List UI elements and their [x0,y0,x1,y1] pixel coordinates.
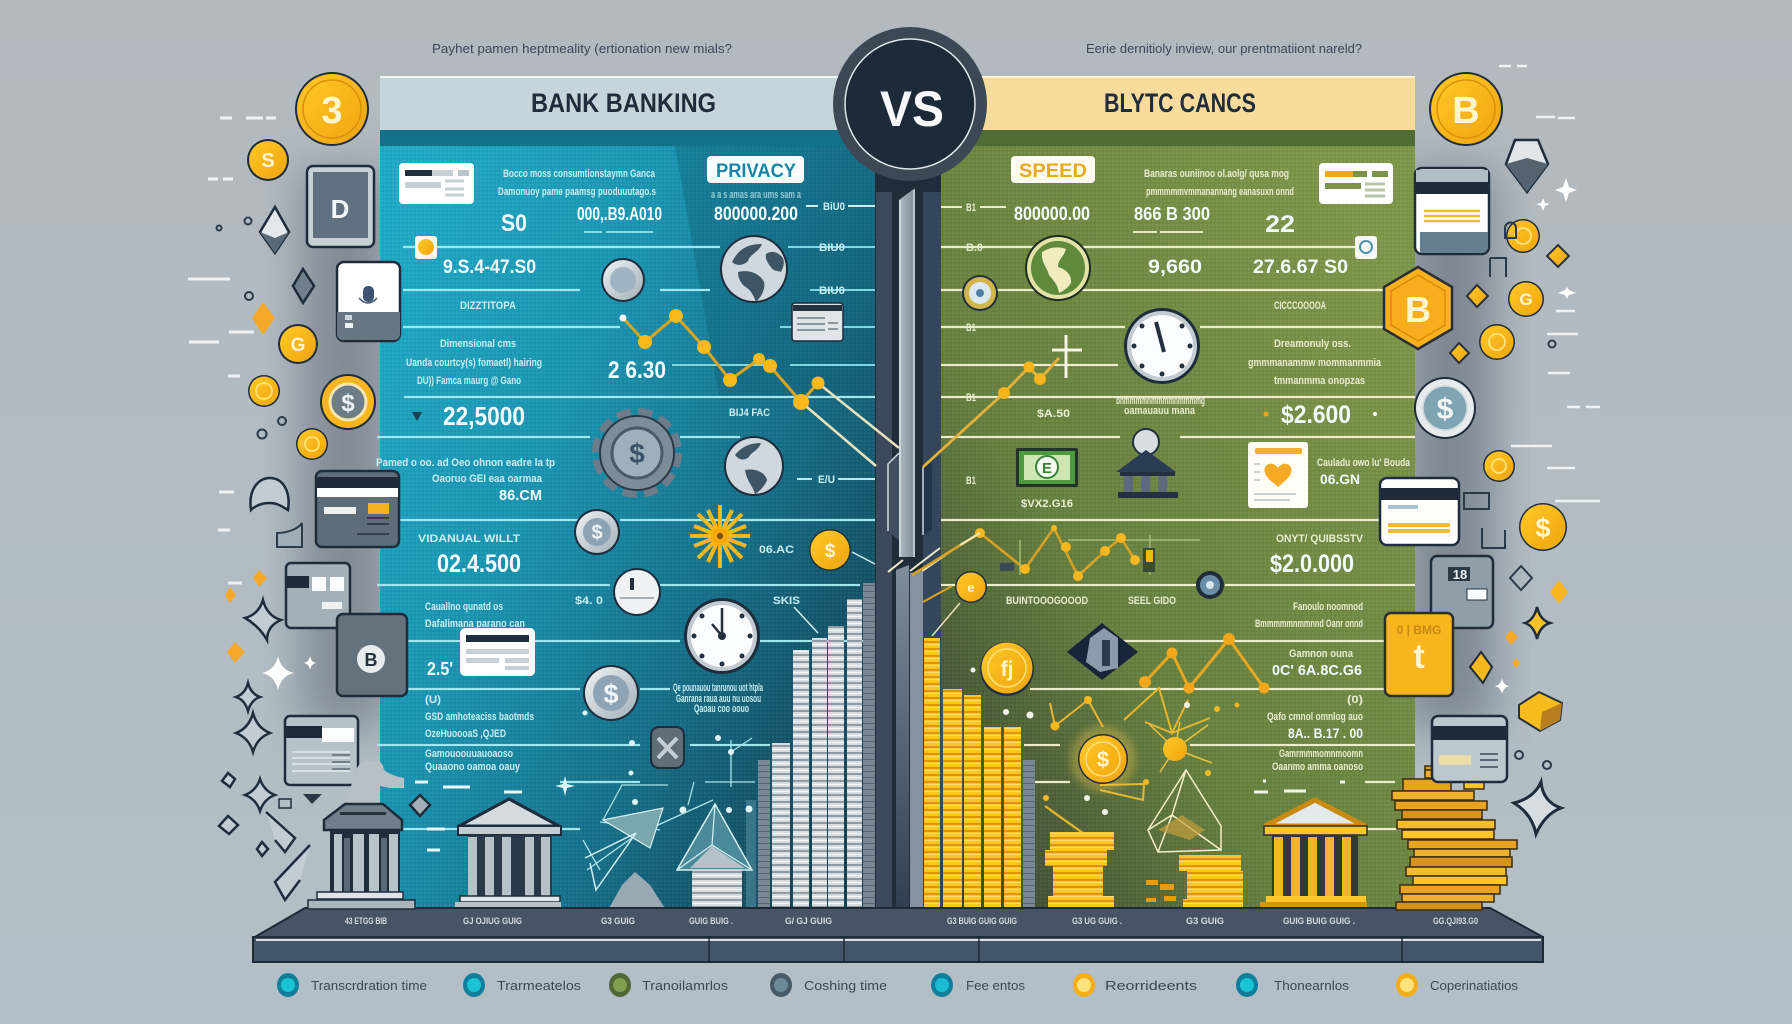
triangle outline [585,833,636,890]
pyramid [677,804,752,870]
bar chart gold [924,638,1035,910]
text stack right: Gamnon ouna [1289,648,1354,660]
legend item 5: Fee entos [966,978,1025,993]
paper money shape [603,808,663,848]
line chart center [912,525,1200,581]
panel: bank banking [377,129,875,910]
axis labels left: B1 [966,322,976,334]
text block top: Banaras ouniinoo ol.aolg/ qusa mog [1144,168,1289,180]
bits dashes [1254,781,1345,792]
coin: G [291,335,305,356]
text label: DIZZTITOPA [460,300,516,312]
gold coin large [980,642,1034,696]
pale cloud over panel edge [347,760,404,830]
axis labels right: BIU0 [819,242,845,254]
label: BIJ4 FAC [729,407,770,419]
legend item 1: Transcrdration time [311,978,427,993]
coin [1506,219,1540,253]
small triangle [303,794,322,804]
bank gold [1260,800,1367,910]
right side icons [1380,66,1600,834]
legend item 6: Reorrideents [1105,978,1198,993]
card white top [1415,168,1489,254]
text block middle [1248,338,1382,387]
small burst [1150,722,1212,772]
value 2.5: 2.5' [427,659,453,679]
line chart upper [923,335,1082,467]
card lined [285,716,358,785]
coin: G [1519,290,1533,309]
gem [260,207,289,253]
small notes [673,682,763,715]
small notes: Qe pounauou tanrunou uot htpla [673,682,763,694]
text block beside note: Cauladu owo lu' Bouda [1317,457,1411,469]
legend item 6 [1073,973,1198,997]
small coin [962,275,998,311]
chip [415,236,437,259]
value block: $2.0.000 [1270,550,1354,578]
heading value [418,533,521,578]
platform labels: 43 ETGG BIB [345,916,387,926]
text stack right: Qafo cmnol omnlog auo [1267,711,1363,723]
card dark [316,471,399,547]
speed badge [1011,156,1095,183]
coin ring: $ [341,390,355,417]
triangle marker [412,412,422,421]
grey square icon [307,166,374,247]
axis labels left [941,202,1006,404]
text stack right: Fanoulo noomnod [1293,601,1363,613]
small card [792,303,843,341]
stack [692,870,742,910]
axis labels right: BIU0 [819,285,845,297]
dark hex icon [1067,623,1138,680]
small coin gold [923,571,987,636]
shaded halo right [1405,170,1495,730]
coin [1479,324,1515,360]
small coin gold: e [967,580,975,595]
text block middle [406,338,542,387]
coin dollar [1519,503,1567,551]
bank dome [1116,429,1178,498]
gold plate: t [1413,638,1425,676]
legend item 1 [277,973,427,997]
card white [337,262,400,341]
card middle [460,628,535,676]
gold plate: 0 | BMG [1397,623,1441,637]
axis labels left: B.0 [966,242,983,254]
hexagon B: B [1405,289,1431,330]
platform [253,908,1543,962]
coin [1483,450,1515,482]
silver coin dollar: $ [1437,393,1454,426]
diamond [1450,343,1469,363]
privacy badge [707,156,804,183]
central column [875,170,960,910]
hexagon B [1384,267,1452,349]
bank silver [455,799,561,910]
text block middle: Dimensional cms [440,338,516,350]
gem [1506,140,1548,192]
corner doodle [277,523,302,547]
value $2.600: $2.600 [1281,401,1351,429]
text stack right: Bmmmmmnmmnnd Oanr onnd [1255,618,1363,630]
text stack lower left: Gamouoouuauoaoso [425,748,513,760]
legend item 7: Thonearnlos [1274,978,1350,993]
legend item 3: Tranoilamrlos [642,978,729,993]
axis labels right: BiU0 [823,201,845,213]
sparkle [293,269,314,303]
header: bank banking: BANK BANKING [531,88,716,118]
silver coin [574,509,620,555]
coin dollar: $ [1535,513,1551,543]
value 866B300: 866 B 300 [1134,204,1210,224]
grey B card [337,614,407,696]
clock [684,598,760,674]
chip [1355,236,1377,259]
coin big B [1429,72,1503,146]
small outlined rings [216,218,286,438]
grey card 18 [1431,556,1493,628]
silver dial [613,568,661,616]
note center [1116,395,1205,417]
coin stack right [1146,855,1243,909]
underline [584,231,653,233]
diamond [1467,285,1488,307]
bar chart grey [746,583,875,910]
coin big: 3 [321,90,343,132]
legend item 8 [1396,973,1519,997]
platform labels: G3 GUIG [601,916,635,926]
text block top [498,168,656,198]
starburst [690,505,750,568]
gold cube [1519,692,1562,731]
value block [1270,533,1364,578]
banknote [1016,448,1078,487]
question right: Eerie dernitioly inview, our prentmatiiont nareld? [1086,41,1362,56]
card right bottom [1432,716,1507,782]
diamond [1547,245,1569,267]
silver coin: $ [591,522,603,544]
text block small: Dafalimana parano can [425,618,525,630]
silver coin dollar: $ [603,679,619,709]
label with leader [773,595,818,633]
card top left [399,163,474,204]
helmet [250,478,289,510]
coin ring [320,374,376,430]
left panel content [376,156,899,910]
platform labels: G3 UG GUIG . [1072,916,1122,926]
label right [797,474,875,486]
shaded halo left [300,170,390,730]
small diamond [410,795,430,816]
tiny note: a a s amas ara ums sam a [711,189,802,201]
text block top [1144,168,1294,198]
text stack right: 0C' 6A.8C.G6 [1272,662,1362,679]
underline [1133,231,1203,233]
gold coin large: fj [1001,658,1013,681]
platform labels: G/ GJ GUIG [785,916,832,926]
coin [247,139,289,181]
globe [720,235,788,303]
heading value: VIDANUAL WILLT [418,533,520,545]
text stack right [1255,601,1363,773]
gear [599,415,675,491]
blue dot coin [1196,571,1224,599]
platform labels: GJ OJIUG GUIG [463,916,522,926]
text block beside note: 06.GN [1320,471,1360,487]
small notes: Ganrana raua auu nu uosou [676,693,761,705]
VS badge: VS [880,81,944,137]
text stack lower left: Quaaono oamoa oauy [425,761,521,773]
label with leader: SKIS [773,595,800,607]
small notes: Qaoau coo oouo [694,703,749,715]
platform labels: GUIG BUIG . [689,916,733,926]
legend item 2 [463,973,582,997]
legend [277,973,1519,997]
gear: $ [629,438,645,469]
coin [248,375,280,407]
text stack right: 8A.. B.17 . 00 [1288,725,1363,741]
silver coin dollar [583,665,639,721]
value 26.30: 2 6.30 [608,357,666,384]
legend item 3 [609,973,729,997]
heading value: 02.4.500 [437,550,521,578]
coin [278,324,318,364]
value 9.S.4-47.S0: 9.S.4-47.S0 [443,257,536,278]
value S0: S0 [501,210,527,237]
text label: CICCCOOOOA [1274,300,1326,312]
legend item 4 [770,973,887,997]
labels: BUINTOOOGOOOD [1006,595,1088,607]
banknote: E [1042,460,1052,477]
legend item 7 [1236,973,1350,997]
text block middle: Uanda courtcy(s) fomaetl) hairing [406,357,542,369]
text block top: Bocco moss consumtionstaymn Ganca [503,168,656,180]
star outline big [1514,782,1561,834]
panel: blytc cancs [941,129,1415,910]
orange diamond [252,302,275,335]
left side icons [188,72,415,909]
text block middle: DU)) Famca maurg @ Gano [417,375,521,387]
text stack lower left [425,694,534,773]
label right: E/U [818,474,835,486]
axis labels left: B1 [966,392,976,404]
label: $VX2.G16 [1021,498,1073,510]
axis labels right [806,201,875,297]
bits dashes [415,782,522,850]
header: blytc cancs: BLYTC CANCS [1104,88,1256,118]
grey B card: B [364,650,378,670]
label: $A.50 [1037,408,1070,420]
network lines [555,710,755,870]
shield icon [651,727,684,768]
gold plate [1385,613,1453,696]
coin: S [261,150,275,172]
privacy badge: PRIVACY [716,161,796,182]
text stack lower left: OzeHuoooaS ,QJED [425,728,506,740]
right panel content [912,156,1411,910]
text block top: pmmmmmvmmanannang eanasuxn onnd [1146,186,1294,198]
orange diamonds [225,570,267,663]
axis label: B1 [966,475,976,487]
coin pile right [1392,766,1517,910]
text block lower: Oaoruo GEI eaa oarmaa [432,473,543,485]
value 22: 22 [1265,211,1295,238]
value block: ONYT/ QUIBSSTV [1276,533,1364,545]
text block small: Cauallno qunatd os [425,601,503,613]
platform labels: GG.QJI93.G0 [1433,916,1478,926]
legend item 4: Coshing time [804,978,887,993]
sparkles right [1470,566,1568,694]
text block lower [376,457,555,504]
card lower [1380,478,1459,545]
text block small [425,601,525,630]
value 27.6.67 S0: 27.6.67 S0 [1253,257,1348,278]
white dashes left [188,118,276,583]
coin big B: B [1452,90,1480,132]
bank left [308,804,415,909]
header: bank banking [380,76,845,130]
platform labels: G3 GUIG [1186,916,1224,926]
silver coin small [601,258,645,302]
VS badge [833,27,987,181]
mountain [608,872,666,910]
card grey [286,563,350,628]
value 800000.200: 800000.200 [714,204,798,225]
globe lower [724,436,784,496]
labels [1006,595,1176,607]
text block lower: Pamed o oo. ad Oeo ohnon eadre la tp [376,457,555,469]
text block middle: tmmanmma onopzas [1274,375,1365,387]
text stack right: Gamrmmmomnmoomn [1279,748,1363,760]
axis labels left: B1 [966,202,976,214]
gold coin [809,529,875,571]
coin [296,428,328,460]
value 800000.00: 800000.00 [1014,204,1090,225]
text stack lower left: GSD amhoteaciss baotmds [425,711,534,723]
label: 06.AC [759,544,794,556]
value 9,660: 9,660 [1148,257,1202,278]
note center: bhmmmmnmmmmnmmmmg [1116,395,1205,407]
platform labels: G3 BUIG GUIG GUIG [947,916,1017,926]
grey card 18: 18 [1453,567,1467,582]
card top right [1319,163,1393,204]
legend item 8: Coperinatiatios [1430,978,1519,993]
text block middle: Dreamonuly oss. [1274,338,1351,350]
network gold [970,668,1240,838]
pyramid outline [1148,770,1221,852]
white sparkles right [1536,178,1577,299]
grey square icon: D [331,194,349,224]
platform labels [345,916,1478,926]
platform labels: GUIG BUIG GUIG . [1283,916,1355,926]
header: blytc cancs [975,76,1415,130]
text block top: Damonuoy pame paamsg puoduuutago.s [498,186,656,198]
text stack lower left: (U) [425,694,441,706]
white dashes right [1499,66,1600,501]
text stack right: (0) [1347,694,1363,706]
value $2.600 [1264,401,1377,429]
white stars [262,656,316,690]
text stack right: Oaanmo amma oanoso [1272,761,1363,773]
text block middle: gmmmanammw mommanmmia [1248,357,1382,369]
value 22,5000: 22,5000 [443,401,525,431]
text block lower: 86.CM [499,487,542,504]
gold coin dollar glow [1070,726,1136,792]
coin stack left [1045,832,1114,908]
clock [1124,308,1200,384]
speed badge: SPEED [1019,161,1087,182]
labels: SEEL GIDO [1128,595,1176,607]
globe green [1025,235,1091,301]
silver coin dollar [1414,377,1476,439]
value 000,B9.A010: 000,.B9.A010 [577,204,662,224]
coin big [295,72,369,146]
sparkles outline [219,600,310,900]
line chart bank [620,309,899,466]
rings [1464,223,1556,769]
coin [1508,281,1544,317]
legend item 2: Trarmeatelos [497,978,582,993]
legend item 5 [931,973,1025,997]
note card heart [1248,442,1308,508]
gold coin dollar glow: $ [1097,747,1109,772]
text block beside note [1317,457,1411,487]
line chart lower [1139,633,1270,694]
note center: oamauauu mana [1124,405,1196,417]
question left: Payhet pamen heptmeality (ertionation new mials? [432,41,732,56]
gold coin: $ [825,541,836,562]
label: $4. 0 [575,595,603,607]
